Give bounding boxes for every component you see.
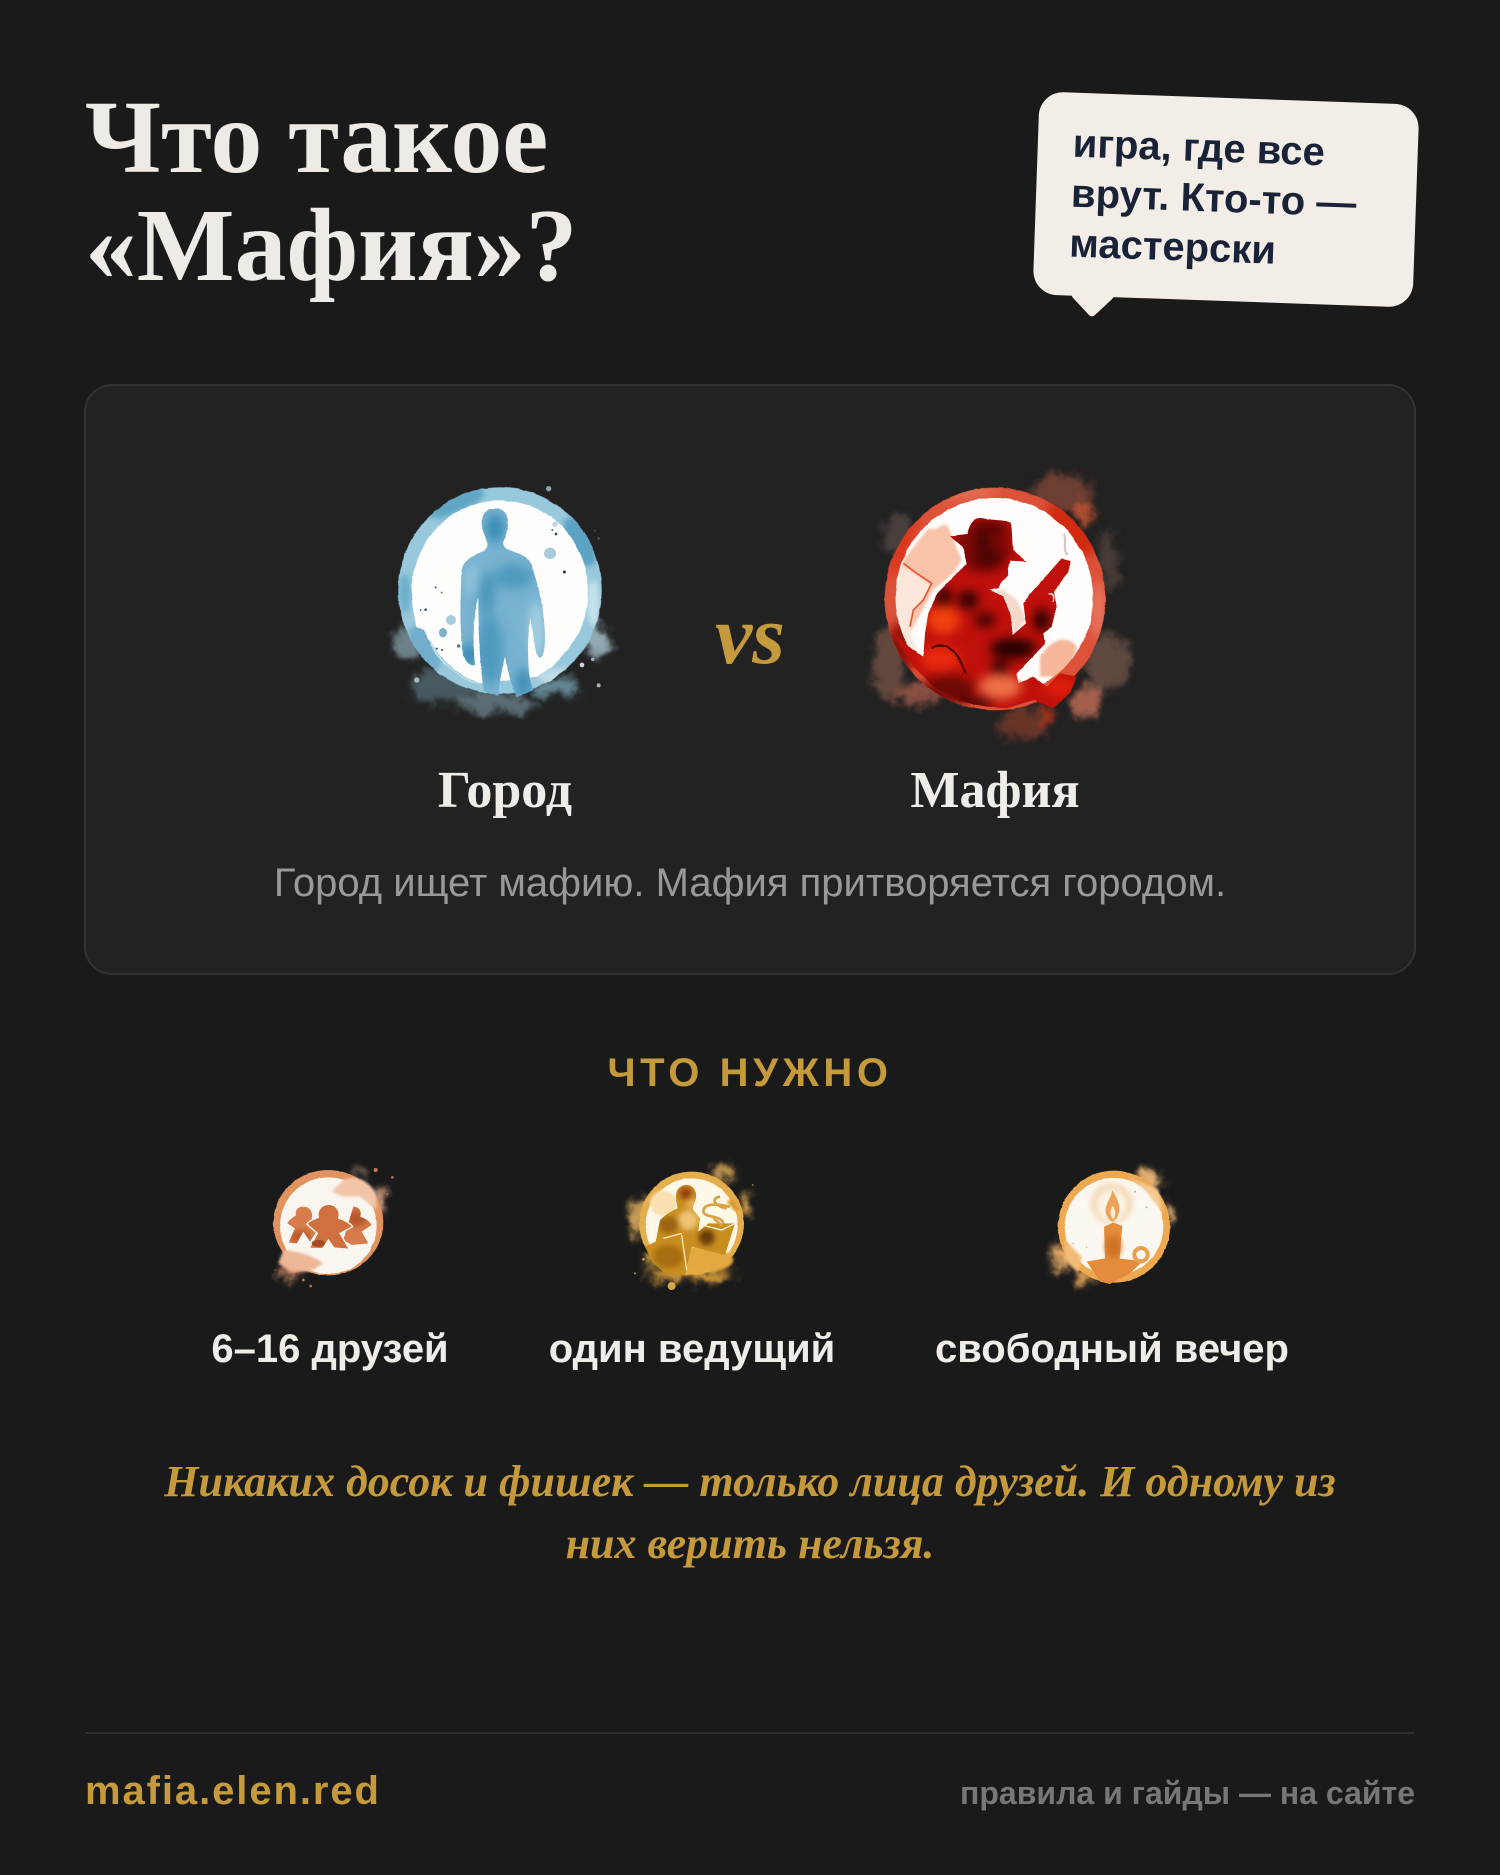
silhouette: townsperson [460, 508, 545, 698]
bubble tail [1070, 273, 1115, 318]
closing quote: них верить нельзя. [566, 1519, 934, 1568]
meeples [288, 1205, 372, 1248]
title: «Мафия»? [85, 189, 577, 303]
icon: mafia medallion [532, 466, 1135, 746]
label: host: один ведущий [549, 1327, 835, 1371]
footer site link: mafia.elen.red [85, 1769, 381, 1813]
vs label: vs [715, 589, 785, 682]
bubble text: мастерски [1069, 222, 1277, 273]
footer note: правила и гайды — на сайте [960, 1775, 1415, 1811]
panel: city vs mafia [84, 384, 1416, 975]
bubble text [1069, 122, 1357, 273]
peach washes [896, 523, 1078, 684]
closing quote [164, 1457, 1336, 1568]
icon: city medallion [388, 486, 619, 720]
candle and flame [1087, 1183, 1148, 1284]
label: friends: 6–16 друзей [211, 1327, 449, 1371]
speech bubble [1033, 91, 1419, 308]
bubble text: врут. Кто-то — [1070, 172, 1357, 226]
label: evening: свободный вечер [935, 1327, 1289, 1371]
city label: Город [438, 762, 572, 819]
icon: host [623, 1159, 756, 1292]
icon: friends [271, 1163, 394, 1290]
footer rule [85, 1732, 1415, 1734]
title: Что такое [85, 81, 548, 195]
closing quote: Никаких досок и фишек — только лица друзей. И одному из [164, 1457, 1336, 1506]
host silhouette with book [645, 1185, 737, 1275]
title [85, 81, 577, 303]
ink splatter [414, 486, 601, 687]
bubble text: игра, где все [1072, 122, 1326, 174]
panel caption: Город ищет мафию. Мафия притворяется городом. [274, 861, 1226, 905]
icon: candle [1045, 1163, 1179, 1292]
mafia label: Мафия [910, 762, 1080, 819]
section heading: ЧТО НУЖНО [607, 1051, 893, 1095]
silhouette: gangster with pistol [894, 518, 1076, 708]
